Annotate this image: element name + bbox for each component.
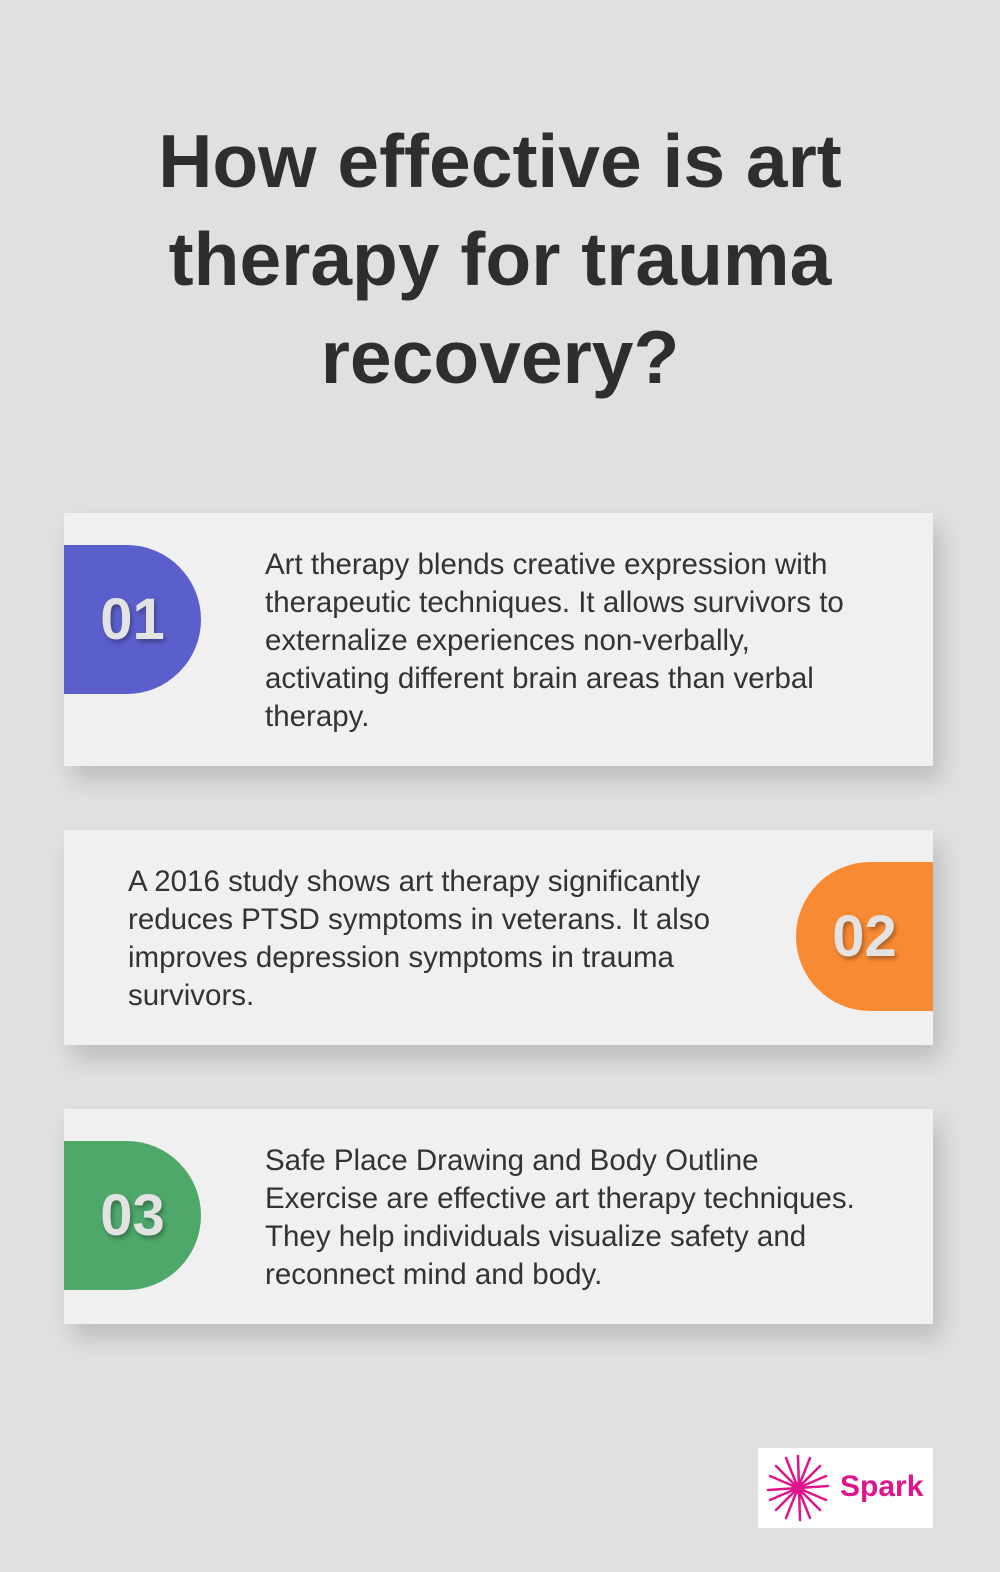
panel: card 03	[64, 1109, 933, 1324]
text block 03	[265, 1144, 855, 1291]
badge 01	[64, 545, 201, 694]
title: recovery?	[321, 315, 679, 399]
text block 02: survivors.	[128, 979, 254, 1012]
text block 02: A 2016 study shows art therapy significantly	[128, 865, 700, 898]
text block 02: improves depression symptoms in trauma	[128, 941, 674, 974]
text block 01: Art therapy blends creative expression with	[265, 548, 827, 581]
text block 03: reconnect mind and body.	[265, 1258, 602, 1291]
icon: spark burst	[766, 1454, 830, 1522]
title	[158, 119, 842, 399]
text block 01: therapy.	[265, 700, 369, 733]
text block 02	[128, 865, 710, 1012]
logo text: Spark	[840, 1470, 923, 1503]
badge 02	[796, 862, 933, 1011]
text block 03: Safe Place Drawing and Body Outline	[265, 1144, 759, 1177]
logo: Spark	[758, 1448, 933, 1528]
text block 03: Exercise are effective art therapy techniques.	[265, 1182, 855, 1215]
panel: card 01	[64, 513, 933, 766]
text block 01: therapeutic techniques. It allows survivors to	[265, 586, 844, 619]
badge 01: 01	[100, 587, 165, 652]
text block 02: reduces PTSD symptoms in veterans. It also	[128, 903, 710, 936]
text block 01: externalize experiences non-verbally,	[265, 624, 750, 657]
text block 01	[265, 548, 844, 733]
text block 03: They help individuals visualize safety and	[265, 1220, 806, 1253]
title: How effective is art	[158, 119, 842, 203]
badge 03	[64, 1141, 201, 1290]
badge 02: 02	[832, 904, 897, 969]
badge 03: 03	[100, 1183, 165, 1248]
text block 01: activating different brain areas than verbal	[265, 662, 814, 695]
panel: card 02	[64, 830, 933, 1045]
title: therapy for trauma	[169, 217, 831, 301]
